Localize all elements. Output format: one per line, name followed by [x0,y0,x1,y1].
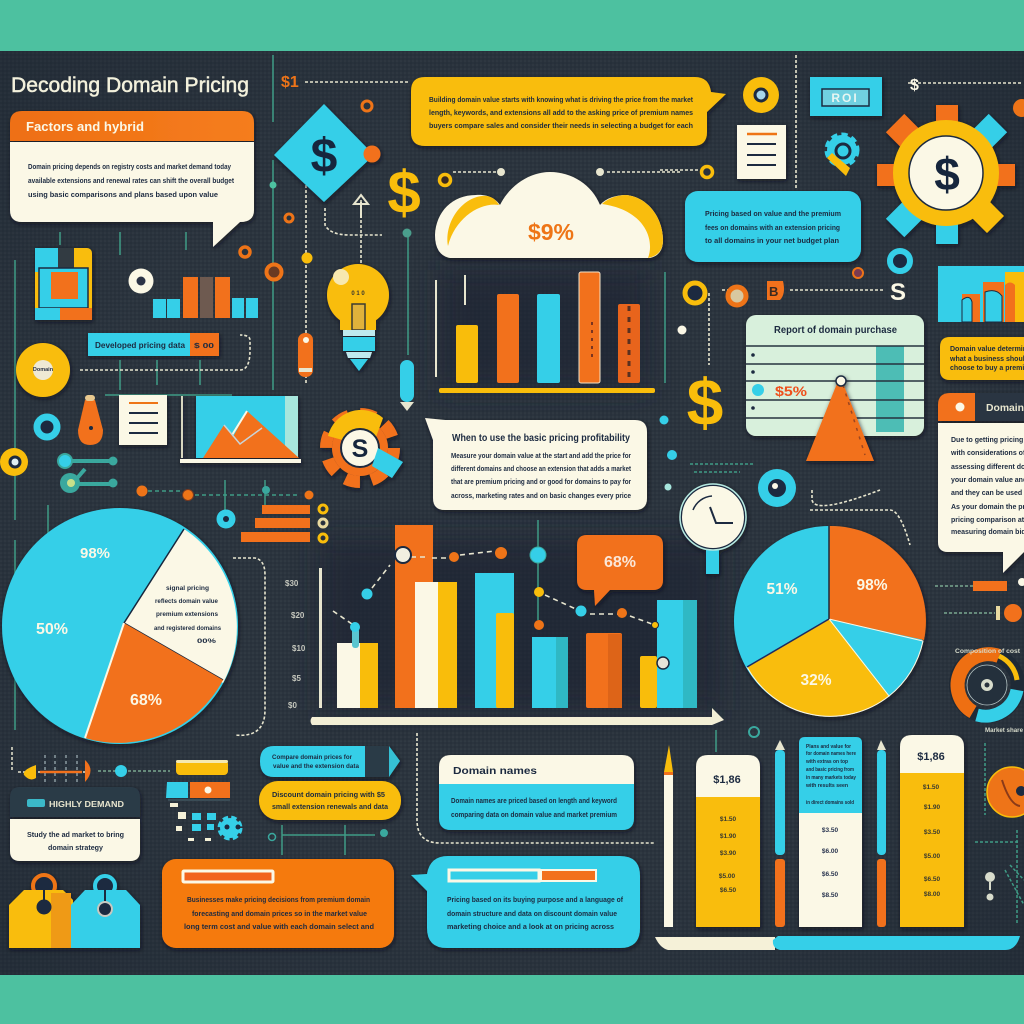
chart: stacked orange bars [241,505,327,542]
connector right bottom [975,743,1024,925]
icon: arrow up [354,195,368,218]
widget: left layered tile [35,248,92,320]
pie caption [154,585,221,645]
price column 3: $1.90 [924,804,941,811]
icon: green pin node [402,228,412,238]
pill: cyan label: value and the extension data [273,764,360,770]
panel text [28,162,234,199]
chart: main bars [285,525,724,725]
price column 1: $5.00 [719,873,736,880]
pencil: cyan orange left [775,740,785,927]
panel: orange note [162,859,394,948]
panel: cyan speech note: domain structure and data on discount domain value [447,909,617,918]
y axis labels: $30 [285,579,299,588]
chart: donut gauge: Market share [985,728,1024,734]
icon: pin nodes row: B [769,284,778,299]
y axis labels [285,579,306,710]
panel: center callout [425,418,647,510]
icon: small yellow node [702,166,712,178]
icon: orange capsule [298,333,313,377]
chart: small bars [153,277,258,318]
callout: yellow top [411,77,726,146]
trend line [333,551,652,624]
panel: domain names: Domain names are priced based on length and keyword [451,796,617,805]
panel: orange note: forecasting and domain prices so in the market value [192,909,367,918]
pill label: $ 00 [194,341,214,350]
pill: cyan label [260,746,400,777]
icon: dollar gear [326,410,403,482]
base shelf [655,936,1020,950]
badge: ROI: ROI [831,91,859,105]
pill: cyan label: Compare domain prices for [272,755,353,761]
icon: cyan ring [890,251,910,271]
pencil: cream [664,745,673,927]
pie label: 98% [856,577,888,594]
chart: left pie [2,508,238,744]
table heading: Report of domain purchase [774,325,897,336]
price marker: $1 [281,74,299,91]
chart: mountain area [180,396,301,463]
price column 2: with results seen [805,783,849,789]
price column 2: in direct domains sold [806,800,854,806]
price column 1: $6.50 [720,887,737,894]
icon: price tags [9,875,140,948]
pie label: 98% [80,545,110,562]
price column 2: $3.50 [822,827,839,834]
pie caption: premium extensions [156,611,218,618]
callout: yellow top: length, keywords, and extensions all add to the asking price of premium names [429,108,693,117]
icon: dollar diamond: $ [311,130,338,183]
panel: domain names: comparing data on domain value and market premium [451,810,617,819]
panel: bottom-left card: domain strategy [48,843,104,852]
green line [715,730,717,752]
panel: cyan speech note [411,856,640,948]
icon: light bulb [327,264,389,371]
panel: center callout: that are premium pricing and or good for domains to pay for [451,477,631,486]
price column 2: $6.50 [822,871,839,878]
icon: cloud connector nodes [440,168,604,186]
pill: yellow label [259,781,401,820]
panel heading: Factors and hybrid [26,120,144,134]
table: comparison [746,315,924,436]
price column 2: and basic pricing from [806,767,854,773]
panel: bottom-left card: Study the ad market to bring [27,830,124,839]
price column 3: $1.50 [923,784,940,791]
icon: orange node right [1013,99,1024,117]
icon: clock magnifier [680,484,746,574]
pill label: Developed pricing data [95,341,186,350]
icon: green node [270,182,276,188]
top green band [0,0,1024,51]
icon: document [737,125,786,179]
icon: cyan circle [216,510,236,528]
connector mini [282,825,375,855]
icon: cyan capsule [400,360,414,411]
price column 2: in many markets today [806,775,857,781]
yellow circle badge: Domain [33,367,54,373]
cloud value: $9% [528,219,574,245]
pie label: 50% [36,621,68,638]
panel: orange note: long term cost and value with each domain select and [184,922,374,931]
price column 3: $8.00 [924,891,941,898]
icon: dollar sign gold: $ [687,365,723,439]
y axis labels: $20 [291,611,305,620]
icon: cream ring [128,268,154,294]
green ring [749,727,759,737]
price column 2: $8.50 [822,892,839,899]
icon: yellow ring far left [0,448,28,476]
panel: domain names [439,755,634,830]
price column 3: $5.00 [924,853,941,860]
icon: dollar tag S: $ [910,77,919,94]
panel text: using basic comparisons and plans based upon value [28,190,218,199]
column 1 price: $1,86 [713,774,741,786]
panel: center callout: When to use the basic pricing profitability [452,432,630,444]
icon: light bulb: 0 1 0 [351,291,365,297]
icon: network nodes [58,454,118,493]
pencil: cyan orange right [877,740,886,927]
icon: small pin [985,872,995,900]
connector dots [268,829,388,840]
icon: cyan target [758,469,796,507]
panel: bottom-left card [10,787,140,861]
panel: cyan speech note: Pricing based on its buying purpose and a language of [447,895,623,904]
panel: center callout: different domains and choose an extension that adds a market [451,464,631,473]
pill: yellow label: small extension renewals and data [272,802,389,811]
column 3 price: $1,86 [917,751,945,763]
panel: center callout: across, marketing rates and on basic changes every price [451,491,631,500]
price column 3: $3.50 [924,829,941,836]
callout: orange percent bubble: 68% [604,554,636,571]
pie label: 32% [800,672,832,689]
panel: center callout: Measure your domain value at the start and add the price for [451,451,631,460]
pie label: 68% [130,692,162,709]
price column 1: $3.90 [720,850,737,857]
callout: blue top right: fees on domains with an extension pricing [705,223,840,232]
chart: top bar chart [436,272,655,393]
yellow circle badge [16,343,70,397]
price column 2: with extras on top [805,759,849,765]
panel: right text: Domain [986,403,1024,414]
panel: bottom-left card: HIGHLY DEMAND [49,799,124,809]
panel: cyan speech note: marketing choice and a look at on pricing across [447,922,614,931]
callout: yellow top: Building domain value starts with knowing what is driving the price from the market [429,95,693,104]
pill label [88,333,219,356]
chart: donut gauge [955,648,1024,734]
icon: small orange ring [285,214,293,222]
price column 2 [799,737,862,927]
y axis labels: $0 [288,701,297,710]
chart: donut gauge: Composition of cost [955,648,1021,655]
icon: document left [119,395,167,445]
pie caption: reflects domain value [155,598,218,605]
icon: yellow dollar: $ [387,159,421,226]
pie label: 51% [766,581,798,598]
panel text: Domain pricing depends on registry costs and market demand today [28,162,232,171]
pie caption: and registered domains [154,625,221,632]
icon: dollar gear: S [352,435,368,463]
price column 3 [900,735,964,927]
price column 2: for domain names here [806,751,856,757]
bottom green band [0,975,1024,1024]
icon: large gear: $ [934,148,960,200]
icon: yellow ring [743,77,779,113]
callout: yellow right [940,337,1024,380]
cloud: price cloud [435,172,663,258]
price column 2: $6.00 [822,848,839,855]
icon: small orange node [362,101,372,111]
table value: $5% [775,383,808,399]
icon: cyan ring left [37,417,57,437]
title: Decoding Domain Pricing [11,74,249,97]
pill: yellow label: Discount domain pricing with $5 [272,790,385,799]
chart: corner bars [938,266,1024,322]
icon: pin nodes row [685,268,906,306]
price column 1: $1.50 [720,816,737,823]
icon: large gear [877,105,1015,244]
icon: small gauge [12,745,170,785]
callout: blue top right: Pricing based on value and the premium [705,209,841,218]
chart: right pie [734,526,926,716]
panel: right text [938,393,1024,573]
callout: blue top right: to all domains in your net budget plan [705,236,839,245]
icon: pin nodes row: S [890,279,906,306]
price column 1 [696,755,760,927]
pie caption: signal pricing [166,585,209,592]
y axis labels: $10 [292,644,306,653]
icon: orange triangle marker [806,376,874,461]
icon: globe with gear [166,760,240,841]
price column 1: $1.90 [720,833,737,840]
panel: domain names: Domain names [453,766,538,777]
y axis labels: $5 [292,674,301,683]
panel: intro callout [10,111,254,247]
connector lines [15,55,1022,843]
icon: small gear [827,135,857,176]
panel text: available extensions and renewal rates can shift the overall budget [28,176,234,185]
callout: blue top right [685,191,861,262]
panel: orange note: Businesses make pricing decisions from premium domain [187,895,370,904]
icon: orange ball [987,767,1024,817]
icon: orange dots row [136,486,314,500]
base axis arrow [310,708,724,725]
icon: orange pin [78,395,103,445]
icons: small dots [660,326,755,490]
icon: dollar diamond [274,104,380,202]
callout: orange percent bubble [577,535,663,606]
badge: ROI [810,77,882,116]
pie caption: 00% [197,638,216,645]
price column 2: Plans and value for [806,744,852,750]
icons: right pins [935,578,1024,622]
price column 3: $6.50 [924,876,941,883]
callout: yellow top: buyers compare sales and consider their needs in selecting a budget for each [429,121,693,130]
icon: orange nodes [240,247,312,280]
